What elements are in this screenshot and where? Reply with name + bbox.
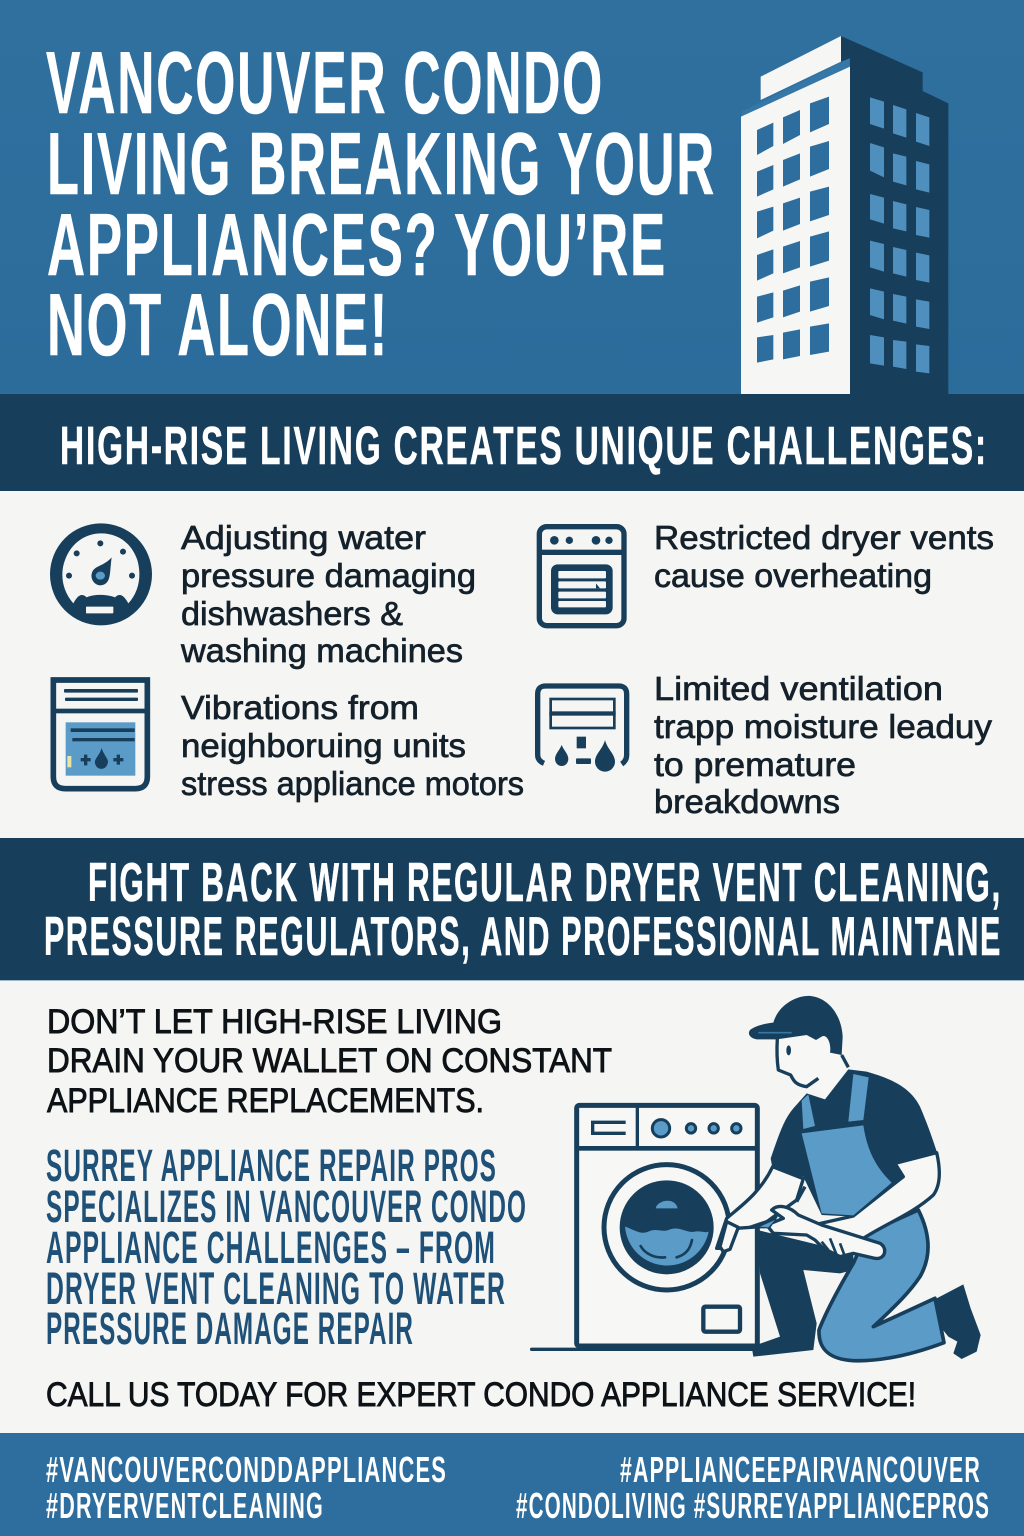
text: company description: DRYER VENT CLEANING TO WATER <box>46 1263 506 1314</box>
technician <box>717 996 981 1361</box>
footer hashtags: #VANCOUVERCONDDAPPLIANCES <box>46 1449 447 1490</box>
text: company description: SURREY APPLIANCE REPAIR PROS <box>46 1140 497 1191</box>
text: ventilation: to premature <box>654 746 856 783</box>
text: water pressure: washing machines <box>180 632 463 669</box>
text: company description <box>46 1140 527 1354</box>
text: ventilation: breakdowns <box>654 783 840 820</box>
text: water pressure <box>180 519 476 669</box>
text: dryer vents <box>654 519 994 594</box>
icon: appliance control panel <box>53 680 147 789</box>
icon: air conditioner with moisture drops <box>538 686 627 772</box>
text: company description: PRESSURE DAMAGE REPAIR <box>46 1303 414 1354</box>
text: water pressure: dishwashers & <box>181 595 403 632</box>
icon: high-rise building <box>741 36 948 395</box>
icon: water pressure gauge <box>50 523 152 625</box>
text: vibrations: stress appliance motors <box>181 765 524 802</box>
band: fight back message <box>0 838 1024 981</box>
text: ventilation <box>654 670 993 820</box>
icon: dryer <box>539 527 624 626</box>
washing machine <box>530 1105 760 1351</box>
footer hashtags <box>0 1433 1024 1536</box>
text: ventilation: trapp moisture leaduy <box>654 708 993 745</box>
text: ventilation: Limited ventilation <box>654 670 943 707</box>
text: water pressure: pressure damaging <box>181 557 476 594</box>
text: water pressure: Adjusting water <box>181 519 426 556</box>
title <box>46 33 716 374</box>
text: wallet warning: DON’T LET HIGH-RISE LIVING <box>47 1003 502 1041</box>
call to action: CALL US TODAY FOR EXPERT CONDO APPLIANCE SERVICE! <box>46 1376 916 1414</box>
text: vibrations: Vibrations from <box>181 689 419 726</box>
footer hashtags: #DRYERVENTCLEANING <box>46 1485 324 1526</box>
text: wallet warning <box>47 1003 612 1120</box>
text: dryer vents: cause overheating <box>654 557 932 594</box>
band: challenges heading <box>0 394 1024 491</box>
illustration: technician repairing washing machine <box>530 996 981 1361</box>
text: company description: APPLIANCE CHALLENGES – FROM <box>46 1222 496 1273</box>
text: vibrations <box>181 689 524 802</box>
panel: challenges <box>50 519 994 820</box>
panel: header <box>0 0 1024 395</box>
text: company description: SPECIALIZES IN VANCOUVER CONDO <box>46 1181 527 1232</box>
title: NOT ALONE! <box>47 275 389 374</box>
text: dryer vents: Restricted dryer vents <box>654 519 994 556</box>
text: vibrations: neighboruing units <box>181 727 466 764</box>
title: VANCOUVER CONDO <box>46 33 604 132</box>
text: wallet warning: DRAIN YOUR WALLET ON CONSTANT <box>47 1042 612 1080</box>
text: wallet warning: APPLIANCE REPLACEMENTS. <box>47 1082 484 1120</box>
